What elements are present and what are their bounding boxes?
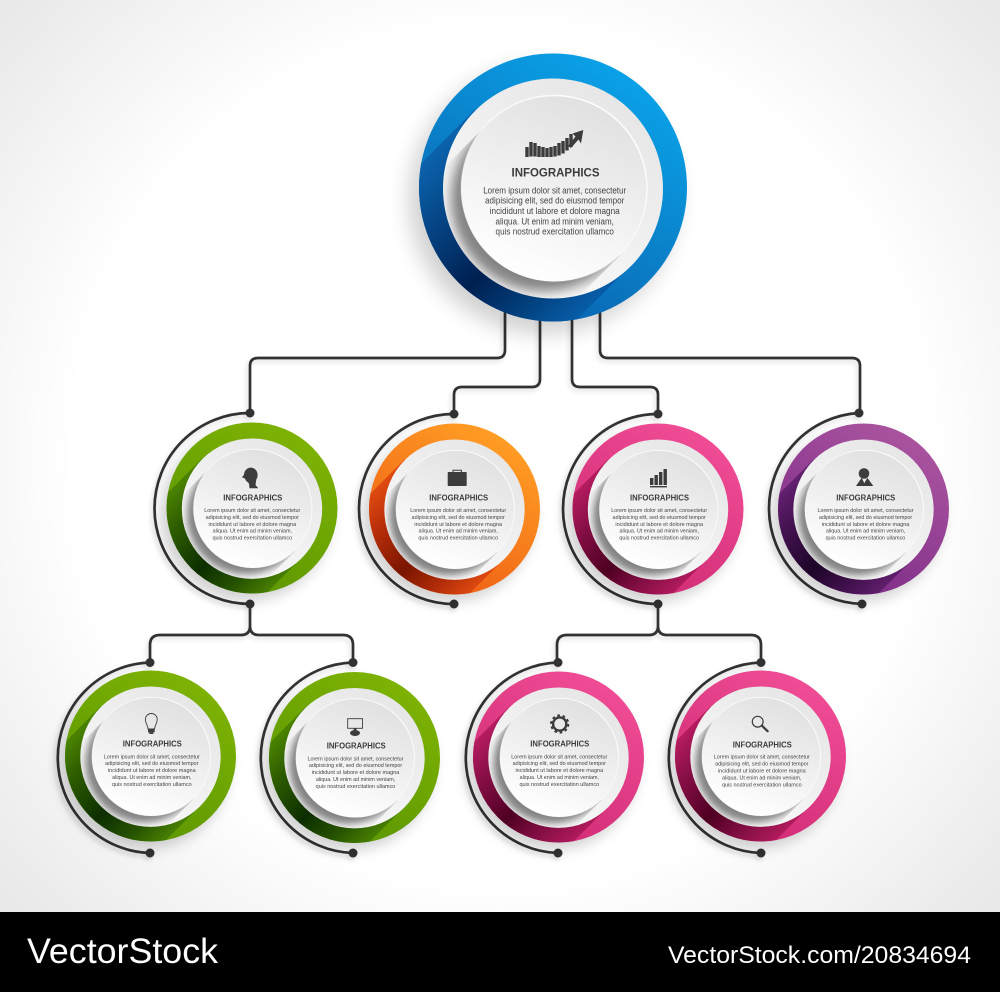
body text: quis nostrud exercitation ullamco <box>212 536 293 542</box>
heading: INFOGRAPHICS <box>123 740 182 749</box>
wire: green branch <box>150 604 353 662</box>
green ring and discs <box>53 670 236 854</box>
pink ring and discs <box>663 670 846 855</box>
body text: aliqua. Ut enim ad minim veniam, <box>316 777 395 783</box>
pink ring and discs <box>461 672 644 856</box>
icon: rising bar chart with arrow <box>525 130 583 157</box>
node: green lower right <box>257 672 440 856</box>
heading: INFOGRAPHICS <box>733 740 792 749</box>
body text: aliqua. Ut enim ad minim veniam, <box>620 529 699 535</box>
body text: aliqua. Ut enim ad minim veniam, <box>213 529 292 535</box>
body text: quis nostrud exercitation ullamco <box>826 536 906 542</box>
connector dots <box>146 408 866 858</box>
body text <box>308 756 404 790</box>
wire: top to second node <box>454 318 540 414</box>
icon: bar chart <box>650 469 667 487</box>
wire: pink branch <box>557 604 761 662</box>
heading: INFOGRAPHICS <box>327 742 386 751</box>
icon: monitor <box>348 719 362 736</box>
node: green upper <box>156 422 338 607</box>
body text: quis nostrud exercitation ullamco <box>722 782 802 788</box>
body text: adipisicing elit, sed do eiusmod tempor <box>485 196 624 206</box>
body text: adipisicing elit, sed do eiusmod tempor <box>206 515 299 521</box>
icon: gear <box>551 715 568 733</box>
body text: Lorem ipsum dolor sit amet, consectetur <box>714 755 810 761</box>
body text: incididunt ut labore et dolore magna <box>515 768 604 774</box>
body text: quis nostrud exercitation ullamco <box>496 227 614 237</box>
body text: adipisicing elit, sed do eiusmod tempor <box>105 761 198 767</box>
body text: incididunt ut labore et dolore magna <box>414 522 503 528</box>
body text: quis nostrud exercitation ullamco <box>316 784 396 790</box>
green ring and discs <box>257 672 440 856</box>
node: purple <box>766 424 949 608</box>
body text: adipisicing elit, sed do eiusmod tempor <box>819 515 912 521</box>
body text: Lorem ipsum dolor sit amet, consectetur <box>204 508 300 514</box>
footer image id text: VectorStock.com/20834694 <box>668 942 971 969</box>
body text <box>611 508 707 542</box>
body text: incididunt ut labore et dolore magna <box>108 768 196 774</box>
body text <box>204 508 300 542</box>
body text: Lorem ipsum dolor sit amet, consectetur <box>104 754 200 760</box>
body text <box>714 755 810 788</box>
body text: quis nostrud exercitation ullamco <box>519 782 600 788</box>
body text: Lorem ipsum dolor sit amet, consectetur <box>308 756 404 762</box>
body text: Lorem ipsum dolor sit amet, consectetur <box>611 508 707 514</box>
body text: Lorem ipsum dolor sit amet, consectetur <box>410 508 506 514</box>
heading: INFOGRAPHICS <box>836 494 895 503</box>
body text: incididunt ut labore et dolore magna <box>208 522 297 528</box>
body text: aliqua. Ut enim ad minim veniam, <box>520 775 599 781</box>
arc: purple node <box>769 413 862 604</box>
node: pink upper <box>560 424 744 608</box>
heading: INFOGRAPHICS <box>512 166 600 180</box>
icon: business person <box>856 468 873 486</box>
arc: lower green left <box>58 662 150 853</box>
arc: green node <box>155 413 250 604</box>
body text: aliqua. Ut enim ad minim veniam, <box>722 775 802 781</box>
icon: magnifier <box>752 716 768 731</box>
node: orange <box>357 424 540 608</box>
body text: Lorem ipsum dolor sit amet, consectetur <box>511 754 607 760</box>
icon: briefcase <box>448 470 467 486</box>
body text: Lorem ipsum dolor sit amet, consectetur <box>818 508 914 514</box>
icon: light bulb <box>145 714 157 734</box>
main node: blue circle <box>400 54 687 342</box>
heading: INFOGRAPHICS <box>630 494 689 503</box>
footer logo text: VectorStock <box>27 932 219 971</box>
heading: INFOGRAPHICS <box>530 740 589 749</box>
pink ring and discs <box>560 424 744 608</box>
body text: aliqua. Ut enim ad minim veniam, <box>496 216 614 226</box>
body text: incididunt ut labore et dolore magna <box>312 770 400 776</box>
body text: aliqua. Ut enim ad minim veniam, <box>112 775 192 781</box>
body text: adipisicing elit, sed do eiusmod tempor <box>309 763 402 769</box>
body text: incididunt ut labore et dolore magna <box>718 769 806 775</box>
footer band <box>0 912 1000 992</box>
body text: adipisicing elit, sed do eiusmod tempor <box>613 515 706 521</box>
body text: quis nostrud exercitation ullamco <box>619 536 700 542</box>
wire: top to first node <box>250 312 505 413</box>
connector wires <box>58 312 866 858</box>
wire: top to third node <box>572 318 658 414</box>
body text <box>104 754 200 788</box>
body text: quis nostrud exercitation ullamco <box>112 782 192 788</box>
purple ring and discs <box>766 424 949 608</box>
body text <box>818 508 914 542</box>
body text: incididunt ut labore et dolore magna <box>490 206 620 216</box>
body text: aliqua. Ut enim ad minim veniam, <box>419 529 498 535</box>
body text: adipisicing elit, sed do eiusmod tempor <box>715 762 808 768</box>
heading: INFOGRAPHICS <box>223 494 282 503</box>
body text <box>410 508 506 542</box>
node: pink lower right <box>663 670 846 855</box>
body text: incididunt ut labore et dolore magna <box>822 522 910 528</box>
orange ring and discs <box>357 424 540 608</box>
body text: Lorem ipsum dolor sit amet, consectetur <box>483 185 626 195</box>
icon: head silhouette <box>242 468 258 488</box>
arc: pink node <box>563 414 658 604</box>
body text: adipisicing elit, sed do eiusmod tempor <box>412 515 505 521</box>
body text <box>511 754 607 788</box>
body text: quis nostrud exercitation ullamco <box>418 536 499 542</box>
body text: incididunt ut labore et dolore magna <box>615 522 704 528</box>
green ring and discs <box>156 422 338 607</box>
blue ring and discs <box>400 54 687 342</box>
arc: lower green right <box>261 662 353 853</box>
heading: INFOGRAPHICS <box>429 494 488 503</box>
arc: lower pink left <box>466 662 558 853</box>
node: green lower left <box>53 670 236 854</box>
wire: top to fourth node <box>600 312 860 413</box>
arc: lower pink right <box>669 662 761 853</box>
node: pink lower left <box>461 672 644 856</box>
body text <box>483 185 626 237</box>
body text: aliqua. Ut enim ad minim veniam, <box>826 529 905 535</box>
body text: adipisicing elit, sed do eiusmod tempor <box>513 761 606 767</box>
arc: orange node <box>359 414 454 604</box>
